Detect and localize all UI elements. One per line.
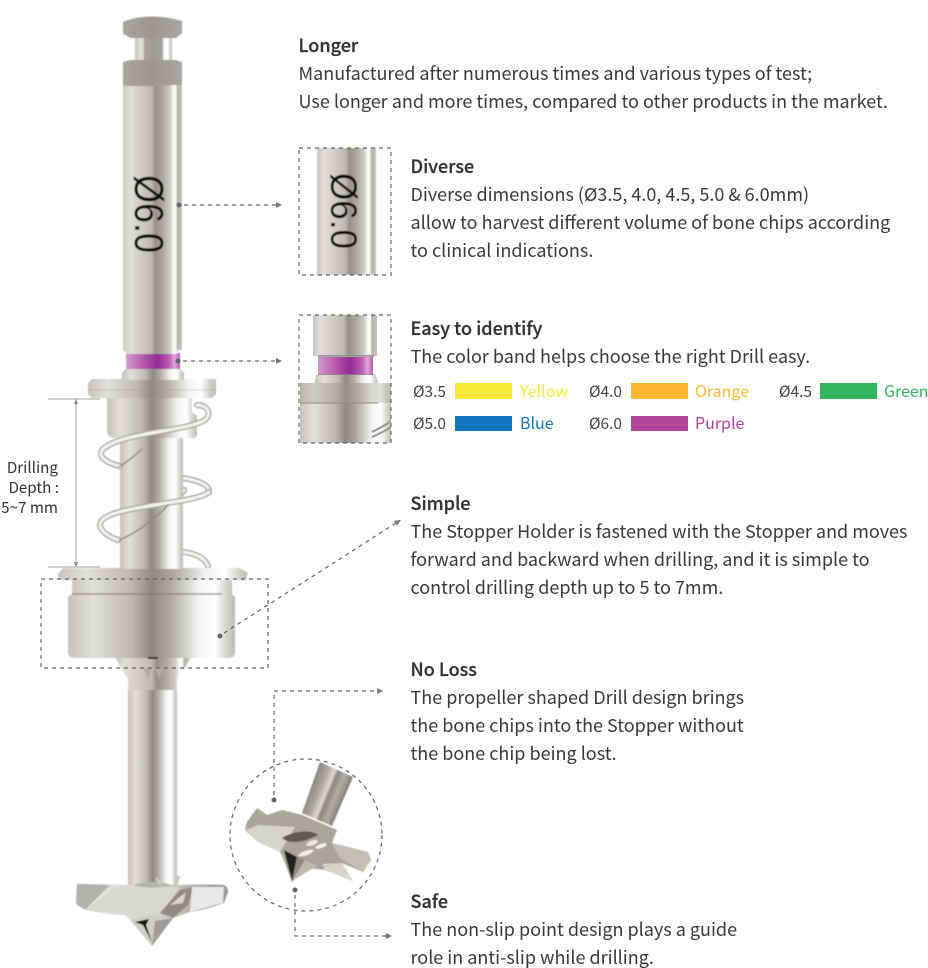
text: diverse: to clinical indications. — [410, 237, 593, 263]
no loss leader — [272, 688, 383, 802]
text: safe: Safe — [410, 888, 448, 914]
text: simple — [410, 490, 907, 600]
text: easy to identify: Easy to identify — [410, 315, 543, 341]
colour legend — [413, 378, 928, 434]
depth label: Drilling — [7, 456, 58, 478]
text: easy to identify — [410, 315, 810, 369]
colour band — [126, 353, 180, 369]
inset shaft — [302, 762, 353, 826]
upper cylinder — [107, 398, 197, 438]
stopper highlight box and callout line — [41, 520, 401, 668]
text: simple: Simple — [410, 490, 470, 516]
text: simple: control drilling depth up to 5 to 7mm. — [410, 574, 723, 600]
stopper cup — [68, 580, 235, 658]
inset: shaft marking — [299, 148, 391, 275]
depth label — [1, 456, 59, 518]
colour legend: Ø5.0 — [413, 412, 446, 434]
text: diverse: Diverse dimensions (Ø3.5, 4.0, 4.5, 5.0 & 6.0mm) — [410, 181, 809, 207]
text: longer — [298, 32, 888, 114]
safe leader — [292, 888, 392, 939]
callout line: diverse — [176, 202, 282, 208]
inset head — [245, 808, 371, 882]
neck — [135, 38, 172, 60]
colour legend: Purple — [695, 410, 745, 434]
cutting head — [76, 876, 228, 946]
text: diverse: Diverse — [410, 153, 474, 179]
text: simple: forward and backward when drilling, and it is simple to — [410, 546, 870, 572]
inset: cutting head circle — [230, 688, 392, 939]
top flange — [88, 379, 216, 398]
text: no loss: The propeller shaped Drill design brings — [410, 684, 744, 710]
inset: shaft marking: Ø6.0 — [323, 173, 364, 249]
callout line: easy to identify — [176, 358, 282, 364]
colour legend: Ø3.5 — [413, 380, 446, 402]
depth label: 5~7 mm — [1, 496, 58, 518]
colour legend: Yellow — [519, 378, 568, 402]
depth label: Depth : — [8, 476, 59, 498]
colour legend: Green — [884, 378, 928, 402]
spring front coils — [100, 405, 209, 540]
text: diverse — [410, 153, 890, 263]
T head — [123, 16, 182, 38]
text: longer: Longer — [298, 32, 359, 58]
text: safe: The non-slip point design plays a guide — [410, 916, 737, 942]
upper shaft — [123, 85, 182, 354]
text: simple: The Stopper Holder is fastened with the Stopper and moves — [410, 518, 907, 544]
text: easy to identify: The color band helps choose the right Drill easy. — [410, 343, 810, 369]
collar below band — [122, 369, 184, 380]
colour legend: Blue — [520, 410, 554, 434]
spring back coils — [120, 437, 209, 566]
text: diverse: allow to harvest different volume of bone chips according — [410, 209, 890, 235]
main shaft section — [120, 436, 183, 569]
drilling depth dimension — [1, 399, 100, 567]
text: no loss: No Loss — [410, 656, 477, 682]
inset: colour band — [299, 315, 392, 443]
colour legend: Ø4.0 — [589, 380, 622, 402]
flutes under stopper — [143, 668, 163, 679]
colour legend: Ø4.5 — [779, 380, 812, 402]
lower shaft — [128, 680, 177, 885]
cone — [116, 658, 190, 690]
stopper plate — [57, 568, 248, 580]
drill illustration — [57, 16, 248, 946]
colour legend: Orange — [695, 378, 749, 402]
text: no loss — [410, 656, 744, 766]
colour legend: Ø6.0 — [589, 412, 622, 434]
text: no loss: the bone chips into the Stopper without — [410, 712, 744, 738]
text: no loss: the bone chip being lost. — [410, 740, 617, 766]
inset drill detail — [245, 762, 371, 882]
text: safe — [410, 888, 737, 968]
hex top — [123, 60, 182, 86]
size marking: Ø6.0 — [126, 175, 172, 253]
text: longer: Use longer and more times, compared to other products in the market. — [298, 88, 888, 114]
text: longer: Manufactured after numerous times and various types of test; — [298, 60, 812, 86]
